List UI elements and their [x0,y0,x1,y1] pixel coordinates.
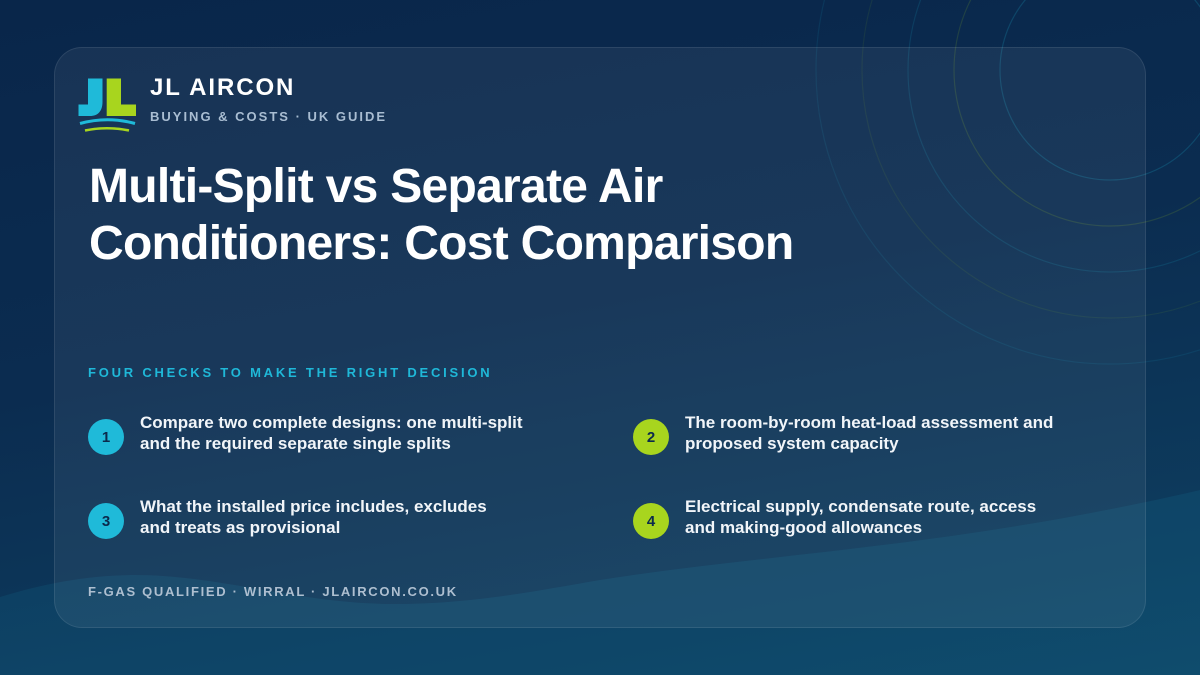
check 3: 3 [102,513,110,530]
check 1: Compare two complete designs: one multi-split [140,413,523,432]
title: Conditioners: Cost Comparison [89,217,793,270]
icon: JL logo [78,78,136,132]
check 1: and the required separate single splits [140,434,451,453]
brand name: JL AIRCON [150,74,295,101]
check 3 [88,497,487,539]
check 2: 2 [647,429,655,446]
panel: main card [54,47,1146,628]
title: Multi-Split vs Separate Air [89,160,663,213]
check 4 [633,497,1036,539]
check 2: The room-by-room heat-load assessment and [685,413,1053,432]
check 3: What the installed price includes, excludes [140,497,487,516]
check 2: proposed system capacity [685,434,899,453]
check 1: 1 [102,429,110,446]
section heading: FOUR CHECKS TO MAKE THE RIGHT DECISION [88,365,492,380]
check 4: Electrical supply, condensate route, access [685,497,1036,516]
check 2 [633,413,1053,455]
check 4: and making-good allowances [685,518,922,537]
footer text: F-GAS QUALIFIED · WIRRAL · JLAIRCON.CO.UK [88,584,458,599]
check 4: 4 [647,513,655,530]
title [89,160,793,270]
check 3: and treats as provisional [140,518,340,537]
check 1 [88,413,523,455]
brand subtitle: BUYING & COSTS · UK GUIDE [150,109,387,124]
